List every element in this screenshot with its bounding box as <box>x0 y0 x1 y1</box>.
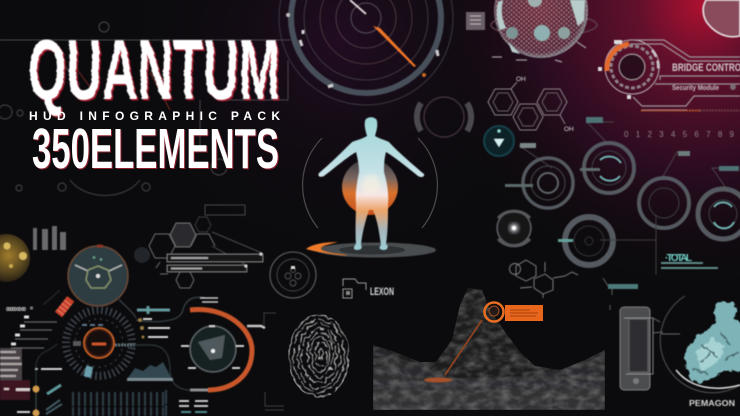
orange target <box>484 302 504 322</box>
connector nodes <box>16 297 205 416</box>
gold sphere <box>0 234 30 282</box>
total label <box>600 215 718 275</box>
data list with sliders <box>6 290 60 416</box>
bottom left round scanner <box>68 246 150 306</box>
fingerprint <box>289 315 349 397</box>
radar dial top centre <box>279 0 453 105</box>
chemical hexagon diagram <box>488 76 574 133</box>
hexagon cluster with labels <box>149 217 263 288</box>
human figure scan <box>303 117 437 258</box>
orange callout <box>505 305 543 321</box>
chemical hexagon diagram: OH <box>516 76 526 83</box>
mini area chart <box>127 362 173 381</box>
number scale: 0 1 2 3 4 5 6 7 8 9 <box>624 130 735 139</box>
stacked pink layers <box>0 348 30 400</box>
top right blob <box>703 0 740 37</box>
sphere <box>497 211 531 246</box>
phone wireframe <box>620 307 680 390</box>
icon: teal glow target <box>484 126 514 156</box>
heart caption: PEMAGON <box>689 399 735 408</box>
red capsule <box>55 296 74 317</box>
orange arc chart <box>181 310 276 390</box>
lexon logo <box>343 279 394 298</box>
bar chart small <box>33 226 66 250</box>
molecule <box>510 260 578 298</box>
chemical hexagon diagram: OH <box>564 126 574 133</box>
headline: 350 elements: 350ELEMENTS <box>32 117 279 181</box>
subtitle: HUD INFOGRAPHIC PACK <box>29 109 280 123</box>
mini caption <box>179 392 284 412</box>
faint HUD behind title <box>0 22 290 215</box>
total label: ·TOTAL <box>665 253 692 264</box>
teal status labels <box>137 298 218 338</box>
tag connector <box>603 278 638 310</box>
dark ring <box>417 97 471 137</box>
text: security module: Security Module <box>672 83 719 92</box>
panel: bridge control <box>598 40 740 110</box>
bar strip chart <box>73 390 166 416</box>
radial dial with atom <box>270 252 316 298</box>
ring gauges with labels <box>505 117 740 265</box>
mountain terrain <box>373 280 605 410</box>
globe <box>491 0 597 62</box>
data list with sliders: 00000 00 00 <box>6 307 26 313</box>
title: QUANTUM: QUANTUM <box>28 23 280 118</box>
lexon logo: LEXON <box>370 286 394 298</box>
circular gauge with orange ring <box>66 310 136 378</box>
small data block <box>466 12 485 30</box>
heart scan circle <box>660 296 740 393</box>
